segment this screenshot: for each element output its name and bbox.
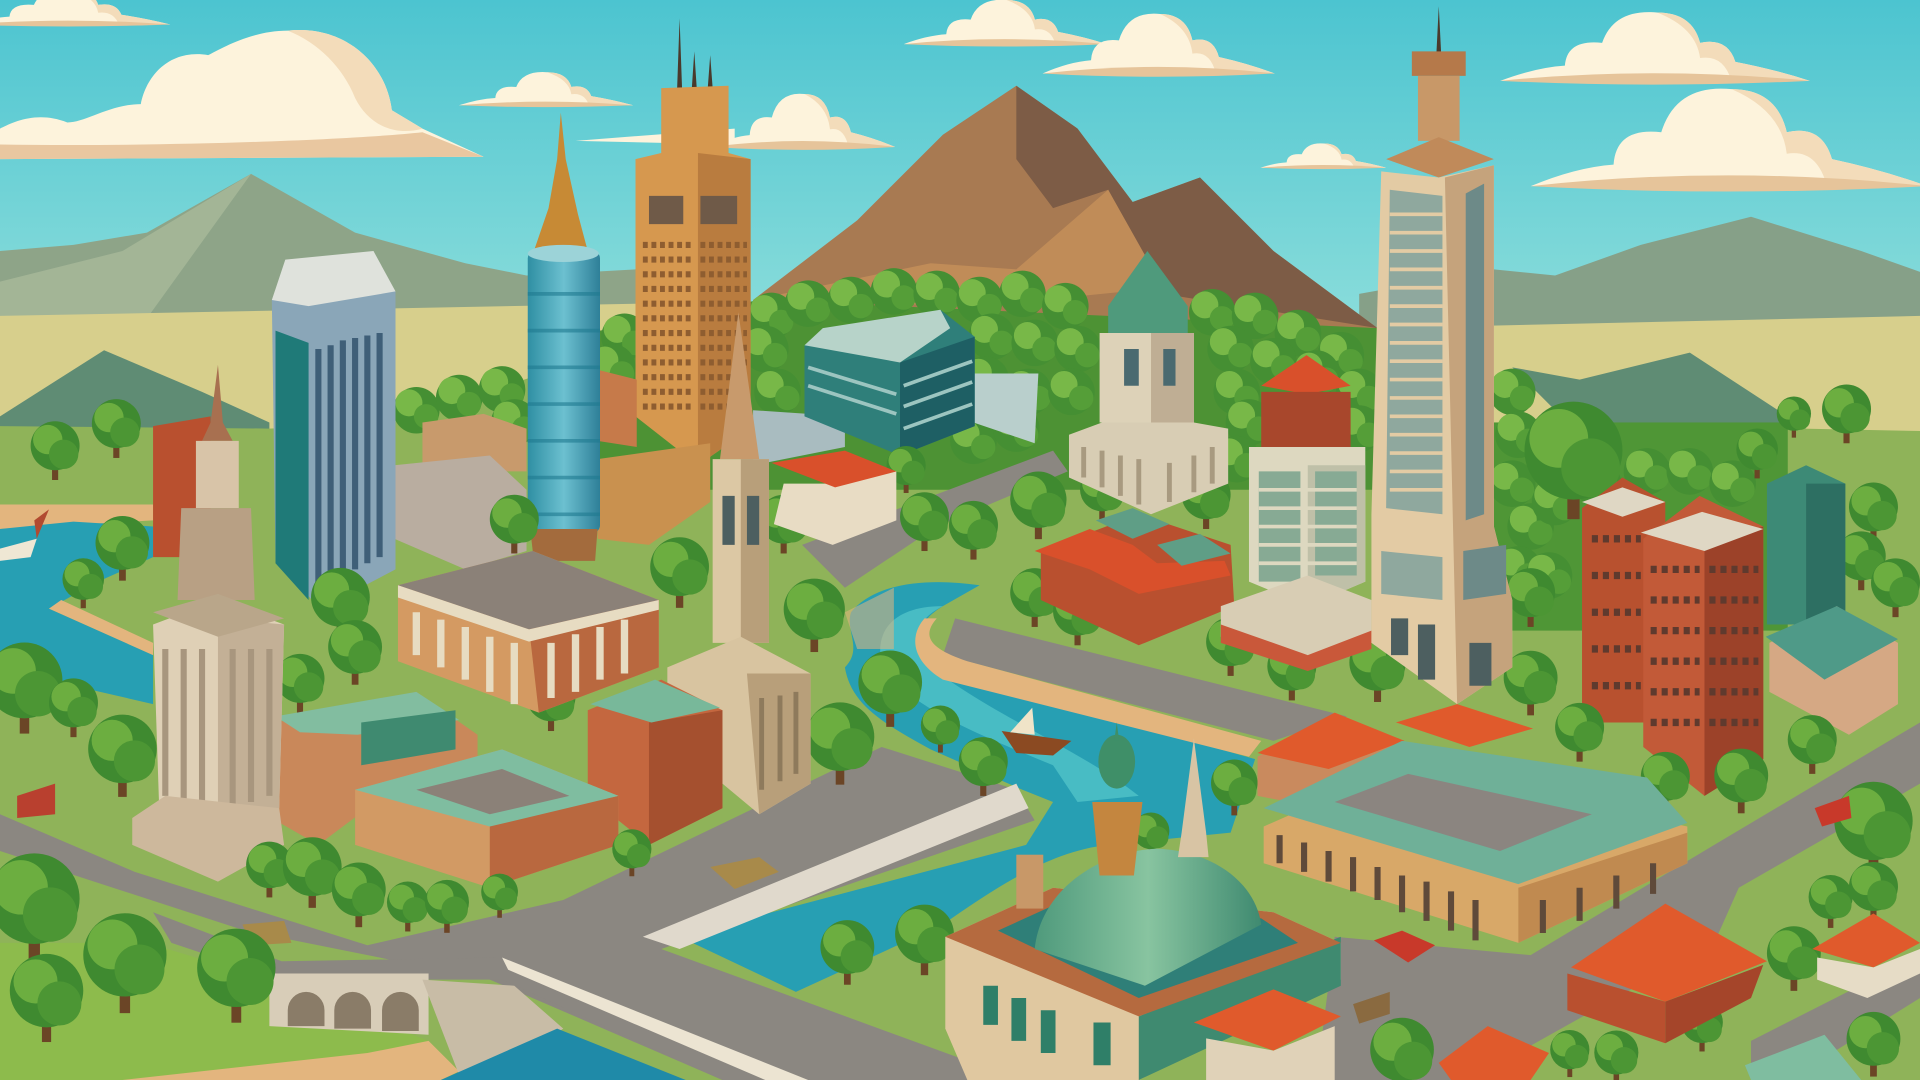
bottom red roof houses	[1194, 904, 1920, 1080]
plains	[0, 304, 1920, 514]
museum flat roof	[398, 551, 659, 713]
cylinder tower	[528, 113, 600, 561]
sailboat	[1002, 708, 1071, 756]
white clock tower	[132, 365, 284, 882]
steeple tower	[667, 312, 811, 814]
river-left sand bank	[49, 600, 153, 655]
bottom-left park	[0, 943, 459, 1080]
red wing behind glass tower	[153, 416, 211, 557]
river left	[0, 522, 153, 704]
white tower with red top	[1221, 355, 1371, 671]
beach left	[0, 504, 153, 529]
low teal-roofed block	[355, 749, 618, 888]
forest background	[31, 268, 1920, 715]
red building with teal roof	[588, 680, 722, 845]
main skyscraper	[1371, 6, 1512, 704]
teal roof building	[276, 692, 478, 845]
green ground	[0, 343, 1920, 1080]
brown mountain	[753, 86, 1378, 367]
glass tower	[272, 251, 396, 609]
distant mountains	[0, 174, 1920, 331]
clouds	[0, 0, 1920, 192]
vehicles	[17, 784, 1851, 1024]
station	[1264, 741, 1687, 943]
green dome tower	[1069, 251, 1228, 514]
sky	[0, 0, 1920, 367]
tan tower	[636, 18, 751, 465]
small red-roof hall	[771, 451, 896, 545]
low hills	[0, 350, 1806, 441]
glass block	[804, 310, 975, 456]
red roof complex	[1035, 508, 1234, 645]
bottom-left trees	[0, 853, 276, 1042]
red roof corner hall	[1258, 704, 1533, 808]
dome building	[945, 722, 1341, 1080]
right brick towers and teal tower	[1582, 465, 1898, 796]
road network	[0, 451, 1920, 1080]
front row trees	[246, 703, 1913, 1080]
central river	[643, 582, 1261, 992]
bridge	[153, 912, 808, 1080]
boat left	[0, 509, 49, 561]
background low buildings	[394, 370, 1038, 569]
mid trees	[0, 446, 1406, 815]
